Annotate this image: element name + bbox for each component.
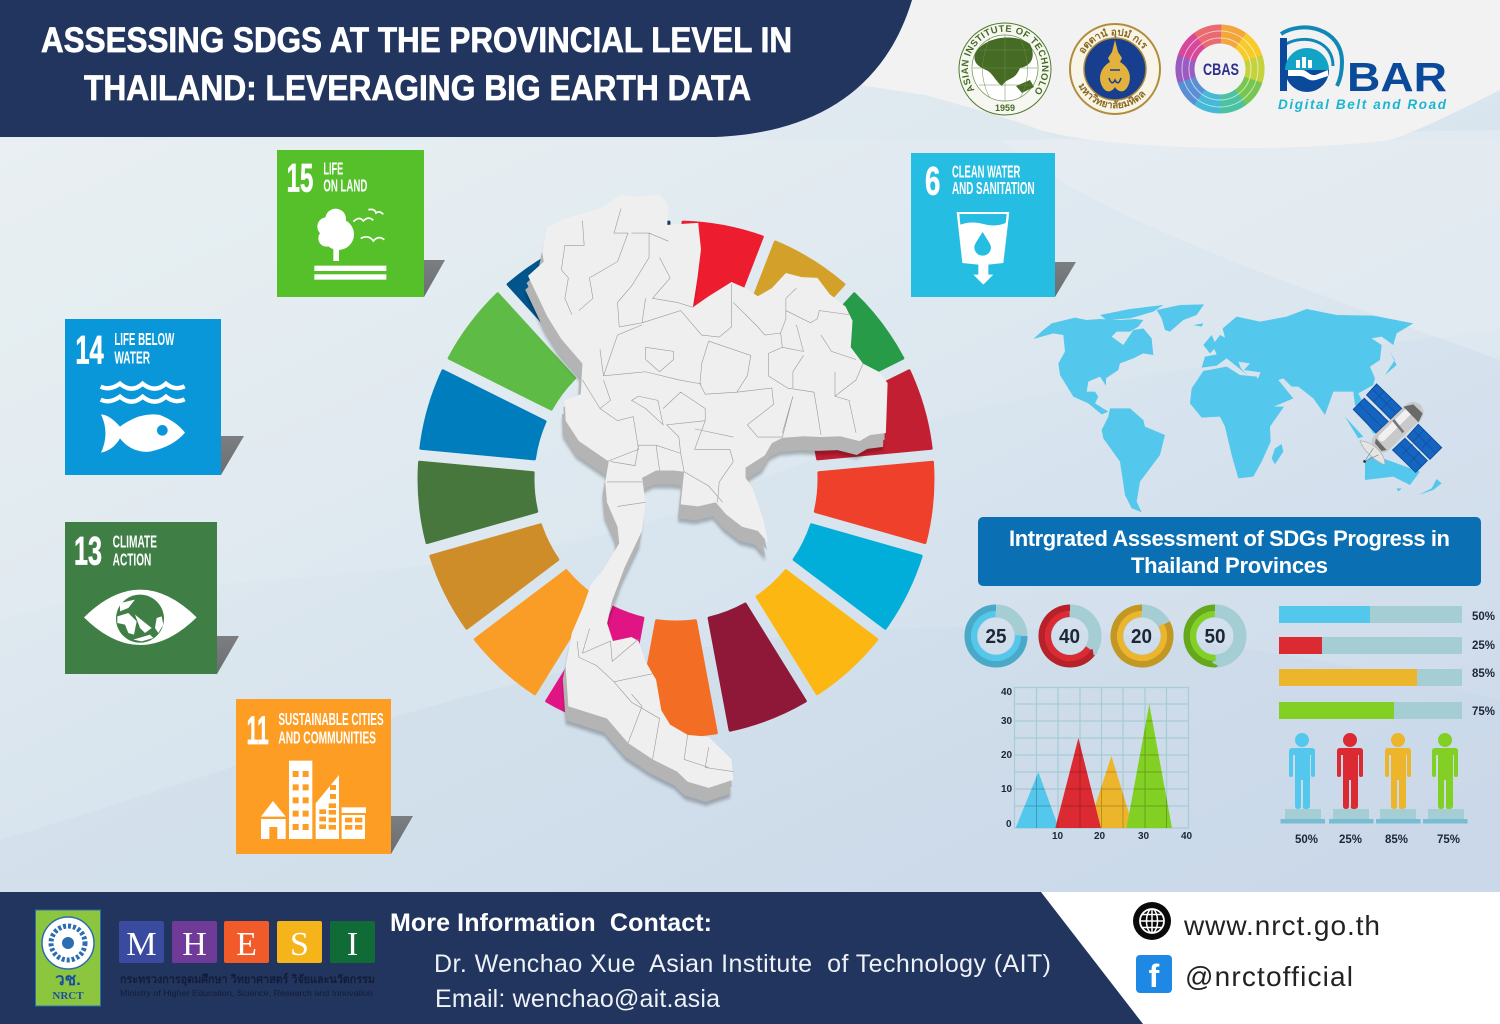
website [1133, 902, 1380, 941]
logo: MHESI: S [290, 926, 309, 963]
area chart: 0 [1006, 819, 1012, 830]
donut: 50 [1187, 608, 1243, 664]
area chart: 40 [1001, 687, 1013, 698]
contact text: More Information Contact: [390, 909, 712, 937]
horizontal progress bars: 50% [1472, 609, 1495, 623]
world map [1033, 304, 1442, 512]
area chart: 30 [1001, 716, 1013, 727]
horizontal progress bars: 85% [1472, 666, 1495, 680]
logo: Asian Institute of Technology [958, 22, 1052, 116]
logo: Digital Belt and Road [1278, 27, 1447, 112]
logo: MHESI: M [126, 926, 157, 963]
people pictograms: 85% [1385, 832, 1408, 846]
title [41, 21, 792, 108]
tile: SDG 11 sustainable cities [236, 699, 413, 854]
contact text: Dr. Wenchao Xue Asian Institute of Technology (AIT) [434, 950, 1051, 978]
header banner [0, 0, 912, 137]
logo: Mahidol University: อตฺตานํ อุปมํ กเร [1080, 28, 1148, 54]
logo: MHESI [119, 921, 375, 998]
icon: person blue [1280, 733, 1325, 824]
contact text: Email: wenchao@ait.asia [435, 985, 720, 1013]
tile: SDG 14 life below water: 14 [75, 328, 104, 372]
tile: SDG 6 clean water: AND SANITATION [952, 178, 1035, 198]
horizontal progress bars [1279, 606, 1495, 719]
icon: person green [1423, 733, 1468, 824]
horizontal progress bars: 25% [1472, 638, 1495, 652]
icon: person yellow [1376, 733, 1420, 824]
logo: MHESI: I [347, 926, 358, 963]
icon: person red [1329, 733, 1374, 824]
logo: MHESI: H [182, 926, 207, 963]
donut: 50: 50 [1204, 626, 1226, 648]
heading banner: integrated assessment [978, 517, 1481, 586]
footer [0, 892, 1500, 1024]
tile: SDG 13 climate action: 13 [74, 530, 102, 574]
logo: Asian Institute of Technology: 1959 [995, 103, 1015, 113]
donut: 25 [968, 608, 1024, 664]
logo: Mahidol University: มหาวิทยาลัยมหิดล [1078, 83, 1146, 109]
title: THAILAND: LEVERAGING BIG EARTH DATA [84, 69, 751, 108]
horizontal progress bars: 75% [1472, 704, 1495, 718]
facebook [1136, 955, 1353, 994]
people pictograms: 25% [1339, 832, 1362, 846]
heading banner: integrated assessment: Intrgrated Assessment of SDGs Progress in [1009, 526, 1450, 551]
tile: SDG 6 clean water: CLEAN WATER [952, 161, 1021, 181]
donut charts [968, 597, 1243, 675]
area chart: 10 [1001, 784, 1013, 795]
area chart: 30 [1138, 831, 1150, 842]
logo: Digital Belt and Road: BAR [1347, 54, 1447, 100]
logo: NRCT: NRCT [52, 990, 84, 1002]
logo: NRCT [36, 910, 100, 1006]
logo: CBAS: CBAS [1203, 60, 1239, 79]
contact text [390, 909, 1051, 1013]
title: ASSESSING SDGS AT THE PROVINCIAL LEVEL IN [41, 21, 792, 60]
area chart: 20 [1001, 750, 1013, 761]
facebook: @nrctofficial [1185, 961, 1353, 992]
donut: 40: 40 [1059, 626, 1080, 648]
logo: CBAS [1171, 20, 1269, 118]
area chart: 10 [1052, 831, 1064, 842]
icon: satellite [1353, 384, 1442, 472]
logo: Digital Belt and Road: Digital Belt and Road [1278, 97, 1447, 112]
donut: 20: 20 [1131, 626, 1152, 648]
logo: Mahidol University [1069, 23, 1161, 115]
donut: 40 [1031, 597, 1109, 675]
tile: SDG 14 life below water: LIFE BELOW [114, 329, 175, 349]
area chart: 40 [1181, 831, 1193, 842]
tile: SDG 14 life below water [65, 319, 244, 475]
logo: NRCT: วช. [55, 970, 81, 989]
donut: 25: 25 [986, 626, 1006, 648]
icon: globe [1133, 902, 1171, 940]
map of Thailand [525, 194, 888, 806]
tile: SDG 13 climate action [65, 522, 239, 674]
tile: SDG 6 clean water: 6 [925, 160, 940, 204]
tile: SDG 13 climate action: CLIMATE [113, 531, 157, 551]
tile: SDG 13 climate action: ACTION [113, 549, 151, 569]
logo: MHESI: Ministry of Higher Education, Science, Research and Innovation [120, 989, 373, 998]
tile: SDG 11 sustainable cities: AND COMMUNITIES [278, 727, 376, 747]
SDG wheel [416, 219, 936, 736]
donut: 20 [1104, 598, 1180, 674]
area chart: 20 [1094, 831, 1106, 842]
icon: facebook [1136, 955, 1172, 994]
tile: SDG 15 life on land: ON LAND [323, 176, 367, 196]
tile: SDG 15 life on land [277, 150, 445, 297]
tile: SDG 15 life on land: LIFE [323, 158, 343, 178]
area chart [1001, 687, 1193, 842]
people pictograms: 50% [1295, 832, 1318, 846]
people pictograms [1280, 733, 1468, 846]
heading banner: integrated assessment: Thailand Provinces [1131, 553, 1328, 578]
tile: SDG 11 sustainable cities: SUSTAINABLE CITIES [278, 709, 384, 729]
tile: SDG 15 life on land: 15 [287, 157, 313, 201]
tile: SDG 6 clean water [911, 153, 1076, 297]
logo: MHESI: กระทรวงการอุดมศึกษา วิทยาศาสตร์ วิจัยและนวัตกรรม [120, 972, 375, 987]
tile: SDG 14 life below water: WATER [114, 347, 150, 367]
tile: SDG 11 sustainable cities: 11 [247, 709, 269, 753]
logo: MHESI: E [236, 926, 257, 963]
website: www.nrct.go.th [1183, 910, 1380, 941]
icon: facebook: f [1149, 958, 1160, 994]
people pictograms: 75% [1437, 832, 1460, 846]
